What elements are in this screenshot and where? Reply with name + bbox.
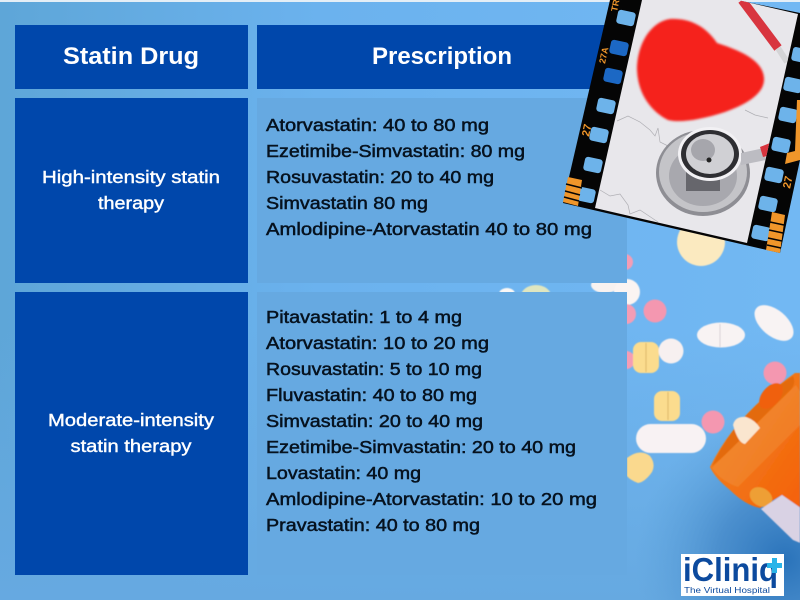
bottle opening [712,376,794,466]
film strip photo [563,0,800,253]
film edge markings: 27A [597,46,610,64]
row panel: moderate-intensity drugs: Fluvastatin: 40 to 80 mg [266,385,477,405]
tablets: row gap [499,254,640,369]
tablet: pink right [764,362,786,384]
header: Statin Drug: Statin Drug [63,43,199,70]
orange blob [749,486,773,508]
film frame [563,0,800,253]
row label: moderate-intensity: Moderate-intensity [48,410,214,430]
photo [590,0,800,250]
row panel: moderate-intensity drugs: Ezetimibe-Simvastatin: 20 to 40 mg [266,437,576,457]
row panel: moderate-intensity drugs: Atorvastatin: 10 to 20 mg [266,333,489,353]
row label: moderate-intensity: statin therapy [70,436,192,456]
bottle body [710,373,800,511]
row label: high-intensity: therapy [98,193,164,213]
bottle neck band [712,385,800,487]
row panel: moderate-intensity drugs: Pravastatin: 40 to 80 mg [266,515,480,535]
row panel: high-intensity drugs: Ezetimibe-Simvastatin: 80 mg [266,141,525,161]
tablet: yellow scored [633,342,659,373]
header: Statin Drug [15,25,248,89]
row label: moderate-intensity [15,292,248,575]
logo: iCliniq: iCliniq [683,551,778,588]
row panel: high-intensity drugs: Rosuvastatin: 20 to 40 mg [266,167,494,187]
film sprocket holes [576,9,800,242]
row label: high-intensity [15,98,248,283]
row panel: high-intensity drugs: Simvastatin 80 mg [266,193,428,213]
pill bottle [710,373,800,545]
tablet: white round [658,338,684,364]
tube [742,0,787,62]
tablet: yellow scored lower [654,391,680,421]
row panel: high-intensity drugs: Amlodipine-Atorvastatin 40 to 80 mg [266,219,592,239]
film edge markings [563,0,800,253]
pills and bottle photo [499,218,800,545]
capsule: white [636,424,706,453]
tablet: white oval tilted [748,298,800,348]
film edge markings: 27 [580,123,594,138]
row panel: moderate-intensity drugs: Amlodipine-Atorvastatin: 10 to 20 mg [266,489,597,509]
film edge hatching [564,184,784,248]
row panel: moderate-intensity drugs [257,292,627,575]
header: Prescription [257,25,617,89]
row panel: moderate-intensity drugs: Pitavastatin: 1 to 4 mg [266,307,462,327]
header: Prescription: Prescription [372,43,512,70]
row label: high-intensity: High-intensity statin [42,167,220,187]
tablet in bottle [733,417,760,444]
ECG lines [600,110,768,222]
row panel: moderate-intensity drugs: Rosuvastatin: 5 to 10 mg [266,359,482,379]
tablet: pink [644,300,666,322]
row panel: moderate-intensity drugs: Simvastatin: 20 to 40 mg [266,411,483,431]
tablet: pink lower [702,410,724,434]
plus sign [767,558,782,573]
tablet: cream [677,218,725,266]
tablet: white oval scored [697,322,745,348]
row panel: high-intensity drugs: Atorvastatin: 40 to 80 mg [266,115,489,135]
logo: iCliniq: The Virtual Hospital [684,585,770,595]
heart [637,19,764,121]
tablet: yellow bottom [627,452,654,483]
row panel: high-intensity drugs [257,98,627,283]
stethoscope [656,127,771,216]
row panel: moderate-intensity drugs: Lovastatin: 40 mg [266,463,421,483]
bottle label [761,495,800,545]
film edge markings: 27 [781,175,795,190]
